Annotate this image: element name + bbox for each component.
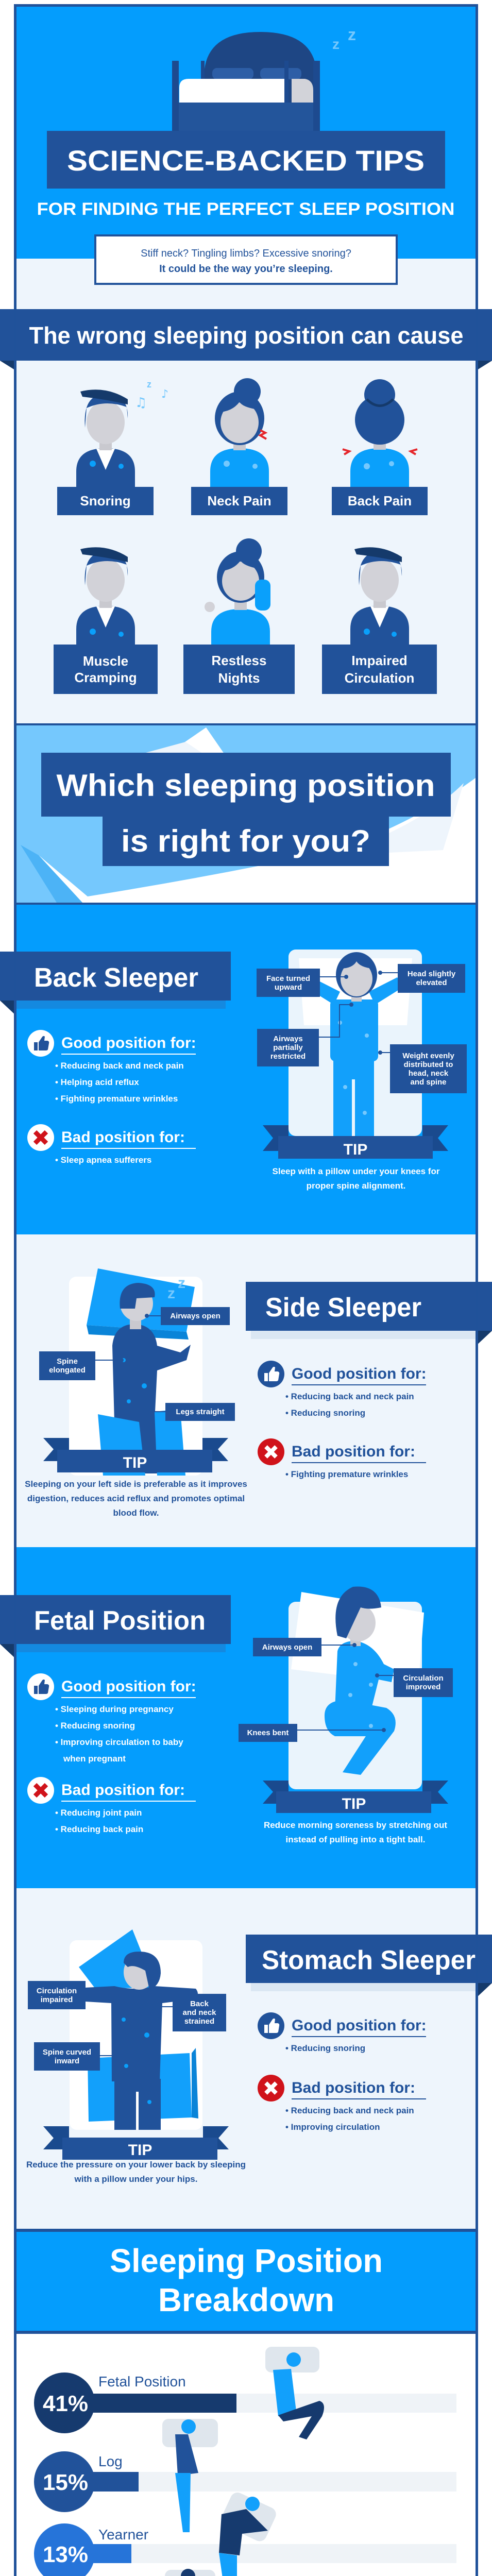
heading: sleeping position breakdown: Sleeping Position (110, 2242, 383, 2279)
label: airways open: Airways open (262, 1642, 312, 1652)
label: face turned upward: upward (275, 983, 302, 991)
ribbon: tip (263, 1125, 448, 1159)
good position list: • Reducing back and neck pain (285, 1392, 414, 1401)
subtitle: FOR FINDING THE PERFECT SLEEP POSITION (37, 199, 455, 219)
illustration: side sleeper: z (178, 1275, 185, 1292)
illustration: side sleeper: z (167, 1285, 175, 1302)
figures (265, 2347, 324, 2439)
chart: sleeping position breakdown (34, 2347, 456, 2576)
banner: side sleeper (246, 1282, 492, 1344)
banner: back sleeper (0, 952, 231, 1014)
good position list (27, 1030, 196, 1104)
label: spine elongated: elongated (49, 1366, 86, 1375)
label: spine elongated (39, 1351, 95, 1380)
label: muscle cramping (54, 645, 158, 694)
good position list: • Reducing snoring (55, 1721, 135, 1731)
row: log 15% (34, 2451, 139, 2512)
label: restless nights (183, 645, 295, 694)
bad position list: • Reducing joint pain (55, 1808, 142, 1818)
label: neck pain: Neck Pain (207, 493, 272, 509)
icon: issue figures (76, 378, 418, 645)
label: airways partially restricted: Airways (273, 1035, 303, 1043)
label: spine curved inward (34, 2042, 100, 2071)
intro callout box: Stiff neck? Tingling limbs? Excessive snoring? (141, 248, 351, 259)
ribbon: tip: TIP (123, 1454, 147, 1471)
background: stomach (14, 1888, 478, 2229)
good position list: Good position for: (61, 1035, 196, 1052)
title banner: SCIENCE-BACKED TIPS (67, 144, 425, 177)
background: issues panel (14, 259, 478, 723)
label: circulation improved: Circulation (403, 1674, 444, 1683)
good position list: • Sleeping during pregnancy (55, 1704, 174, 1714)
row: log 15%: Log (98, 2453, 123, 2469)
good position list (27, 1673, 196, 1764)
good position list: • Reducing snoring (285, 2043, 365, 2053)
label: circulation impaired: Circulation (37, 1987, 77, 1995)
row: fetal 41% (34, 2372, 236, 2433)
illustration: fetal sleeper (263, 1587, 448, 1813)
banner: stomach sleeper: Stomach Sleeper (262, 1945, 476, 1975)
label: muscle cramping: Cramping (74, 670, 137, 685)
label: airways open (253, 1638, 321, 1656)
label: back pain: Back Pain (348, 493, 412, 509)
ribbon: tip (43, 1438, 228, 1472)
background: fetal (14, 1547, 478, 1888)
panel: which position heading (16, 725, 476, 903)
illustration: stomach sleeper (43, 1929, 229, 2160)
label: impaired circulation (322, 645, 437, 694)
panel: back sleeper (0, 950, 467, 1191)
label: snoring: Snoring (80, 493, 131, 509)
title banner (47, 131, 445, 189)
label: restless nights: Nights (218, 670, 260, 686)
intro callout box: It could be the way you’re sleeping. (159, 263, 333, 275)
label: weight evenly distributed: head, neck (409, 1069, 448, 1078)
label: back and neck strained: and neck (182, 2008, 216, 2017)
intro callout box (94, 234, 398, 285)
bad position list (258, 1438, 426, 1479)
ribbon: tip (43, 2126, 229, 2160)
label: impaired circulation: Circulation (345, 670, 414, 686)
tip text: proper spine alignment. (307, 1181, 405, 1191)
label: airways partially restricted: restricted (270, 1052, 306, 1061)
bad position list: Bad position for: (61, 1129, 185, 1146)
icon: bed hero illustration: z (332, 36, 340, 52)
icon: issue figures: ♪ (161, 388, 168, 401)
bad position list (27, 1124, 196, 1165)
label: back and neck strained: Back (190, 1999, 209, 2008)
good position list: • Reducing back and neck pain (55, 1061, 184, 1071)
label: legs straight (165, 1403, 235, 1421)
panel: back sleeper: • Fighting premature wrinkles (55, 1094, 178, 1104)
heading band: wrong sleeping position (0, 309, 492, 369)
icon: issue figures: z (147, 379, 151, 389)
label: spine elongated: Spine (57, 1357, 78, 1366)
row: fetal 41%: 41% (43, 2391, 88, 2416)
label: circulation impaired (28, 1981, 86, 2009)
ribbon: tip (263, 1781, 448, 1813)
label: impaired circulation: Impaired (351, 653, 408, 668)
ribbon: tip: TIP (342, 1795, 366, 1812)
row: yearner 13% (34, 2523, 148, 2576)
label: face turned upward: Face turned (266, 974, 310, 983)
heading: sleeping position breakdown: Breakdown (158, 2281, 334, 2318)
illustration: back sleeper (263, 950, 448, 1159)
icon: bed hero illustration: z (348, 25, 356, 44)
label: airways open: Airways open (170, 1312, 220, 1320)
bad position list: Bad position for: (292, 2079, 415, 2096)
label: back and neck strained (173, 1994, 226, 2031)
label: back pain (332, 487, 428, 515)
good position list: Good position for: (292, 1365, 427, 1382)
label: head slightly elevated: elevated (416, 978, 447, 987)
panel: side sleeper (25, 1268, 492, 1518)
panel: stomach sleeper (26, 1929, 492, 2184)
banner: back sleeper: Back Sleeper (34, 963, 198, 993)
label: weight evenly distributed (390, 1044, 467, 1093)
good position list (258, 1361, 427, 1418)
heading: which sleeping position (41, 753, 451, 817)
label: muscle cramping: Muscle (83, 653, 128, 669)
label: knees bent (239, 1724, 297, 1742)
label: weight evenly distributed: distributed to (404, 1060, 453, 1069)
good position list: • Improving circulation to baby (55, 1737, 183, 1747)
row: yearner 13%: Yearner (98, 2527, 148, 2543)
panel: fetal position: when pregnant (63, 1754, 126, 1764)
bad position list: • Fighting premature wrinkles (285, 1469, 408, 1479)
tip text: Sleeping on your left side is preferable as it improves digestion, reduces acid reflux and promotes optimal blood flow. (25, 1479, 247, 1518)
ribbon: tip: TIP (128, 2142, 152, 2159)
label: back and neck strained: strained (184, 2017, 214, 2026)
label: snoring (57, 487, 154, 515)
bad position list: • Improving circulation (285, 2122, 380, 2132)
good position list: Good position for: (61, 1678, 196, 1695)
bad position list: • Reducing back pain (55, 1824, 143, 1834)
illustration: side sleeper (43, 1268, 228, 1476)
banner: fetal position (0, 1595, 231, 1657)
label: face turned upward (257, 969, 320, 997)
bad position list: • Sleep apnea sufferers (55, 1155, 151, 1165)
label: neck pain (191, 487, 287, 515)
banner: stomach sleeper (246, 1935, 492, 1996)
banner: side sleeper: Side Sleeper (265, 1293, 421, 1323)
bad position list: Bad position for: (61, 1782, 185, 1799)
banner: fetal position: Fetal Position (34, 1606, 206, 1636)
good position list: • Reducing snoring (285, 1408, 365, 1418)
background: side sleeper (14, 1234, 478, 1547)
tip text: Reduce morning soreness by stretching out instead of pulling into a tight ball. (264, 1820, 447, 1844)
label: head slightly elevated: Head slightly (408, 970, 455, 978)
label: knees bent: Knees bent (247, 1728, 289, 1737)
heading: is right for you (103, 817, 389, 866)
label: circulation improved (394, 1668, 453, 1697)
label: legs straight: Legs straight (176, 1408, 225, 1416)
label: airways partially restricted (257, 1029, 319, 1066)
tip text: Reduce the pressure on your lower back by sleeping with a pillow under your hips. (26, 2160, 246, 2184)
label: airways partially restricted: partially (273, 1043, 303, 1052)
bad position list: • Reducing back and neck pain (285, 2106, 414, 2115)
good position list (258, 2012, 427, 2053)
good position list: Good position for: (292, 2017, 427, 2034)
panel: issues grid (54, 378, 437, 694)
row: fetal 41%: Fetal Position (98, 2374, 186, 2389)
ribbon: tip: TIP (344, 1141, 367, 1158)
label: circulation improved: improved (406, 1683, 440, 1691)
good position list: • Helping acid reflux (55, 1077, 139, 1087)
icon: issue figures: ♫ (135, 395, 147, 411)
background: back sleeper (14, 905, 478, 1234)
bad position list: Bad position for: (292, 1443, 415, 1460)
icon: bed hero illustration (172, 25, 356, 131)
label: airways open (161, 1307, 230, 1325)
label: weight evenly distributed: Weight evenly (402, 1051, 454, 1060)
background: breakdown header (14, 2232, 478, 2331)
label: restless nights: Restless (212, 653, 266, 668)
heading: sleeping position breakdown (110, 2242, 383, 2318)
label: spine curved inward: inward (55, 2057, 79, 2065)
row: log 15%: 15% (43, 2470, 88, 2495)
heading: is right for you: is right for you? (121, 824, 370, 858)
label: spine curved inward: Spine curved (43, 2047, 91, 2057)
background: hero (14, 4, 478, 259)
bad position list (258, 2075, 426, 2132)
tip text: Sleep with a pillow under your knees for (273, 1166, 439, 1176)
heading band: wrong sleeping position: The wrong sleeping position can cause (29, 322, 464, 349)
label: circulation impaired: impaired (41, 1995, 73, 2004)
panel: fetal position (0, 1587, 453, 1844)
label: weight evenly distributed: and spine (410, 1078, 446, 1086)
tip text (273, 1166, 440, 1191)
bad position list (27, 1777, 196, 1834)
heading: which sleeping position: Which sleeping position (57, 768, 435, 803)
row: yearner 13%: 13% (43, 2542, 88, 2567)
label: head slightly elevated (398, 964, 465, 993)
